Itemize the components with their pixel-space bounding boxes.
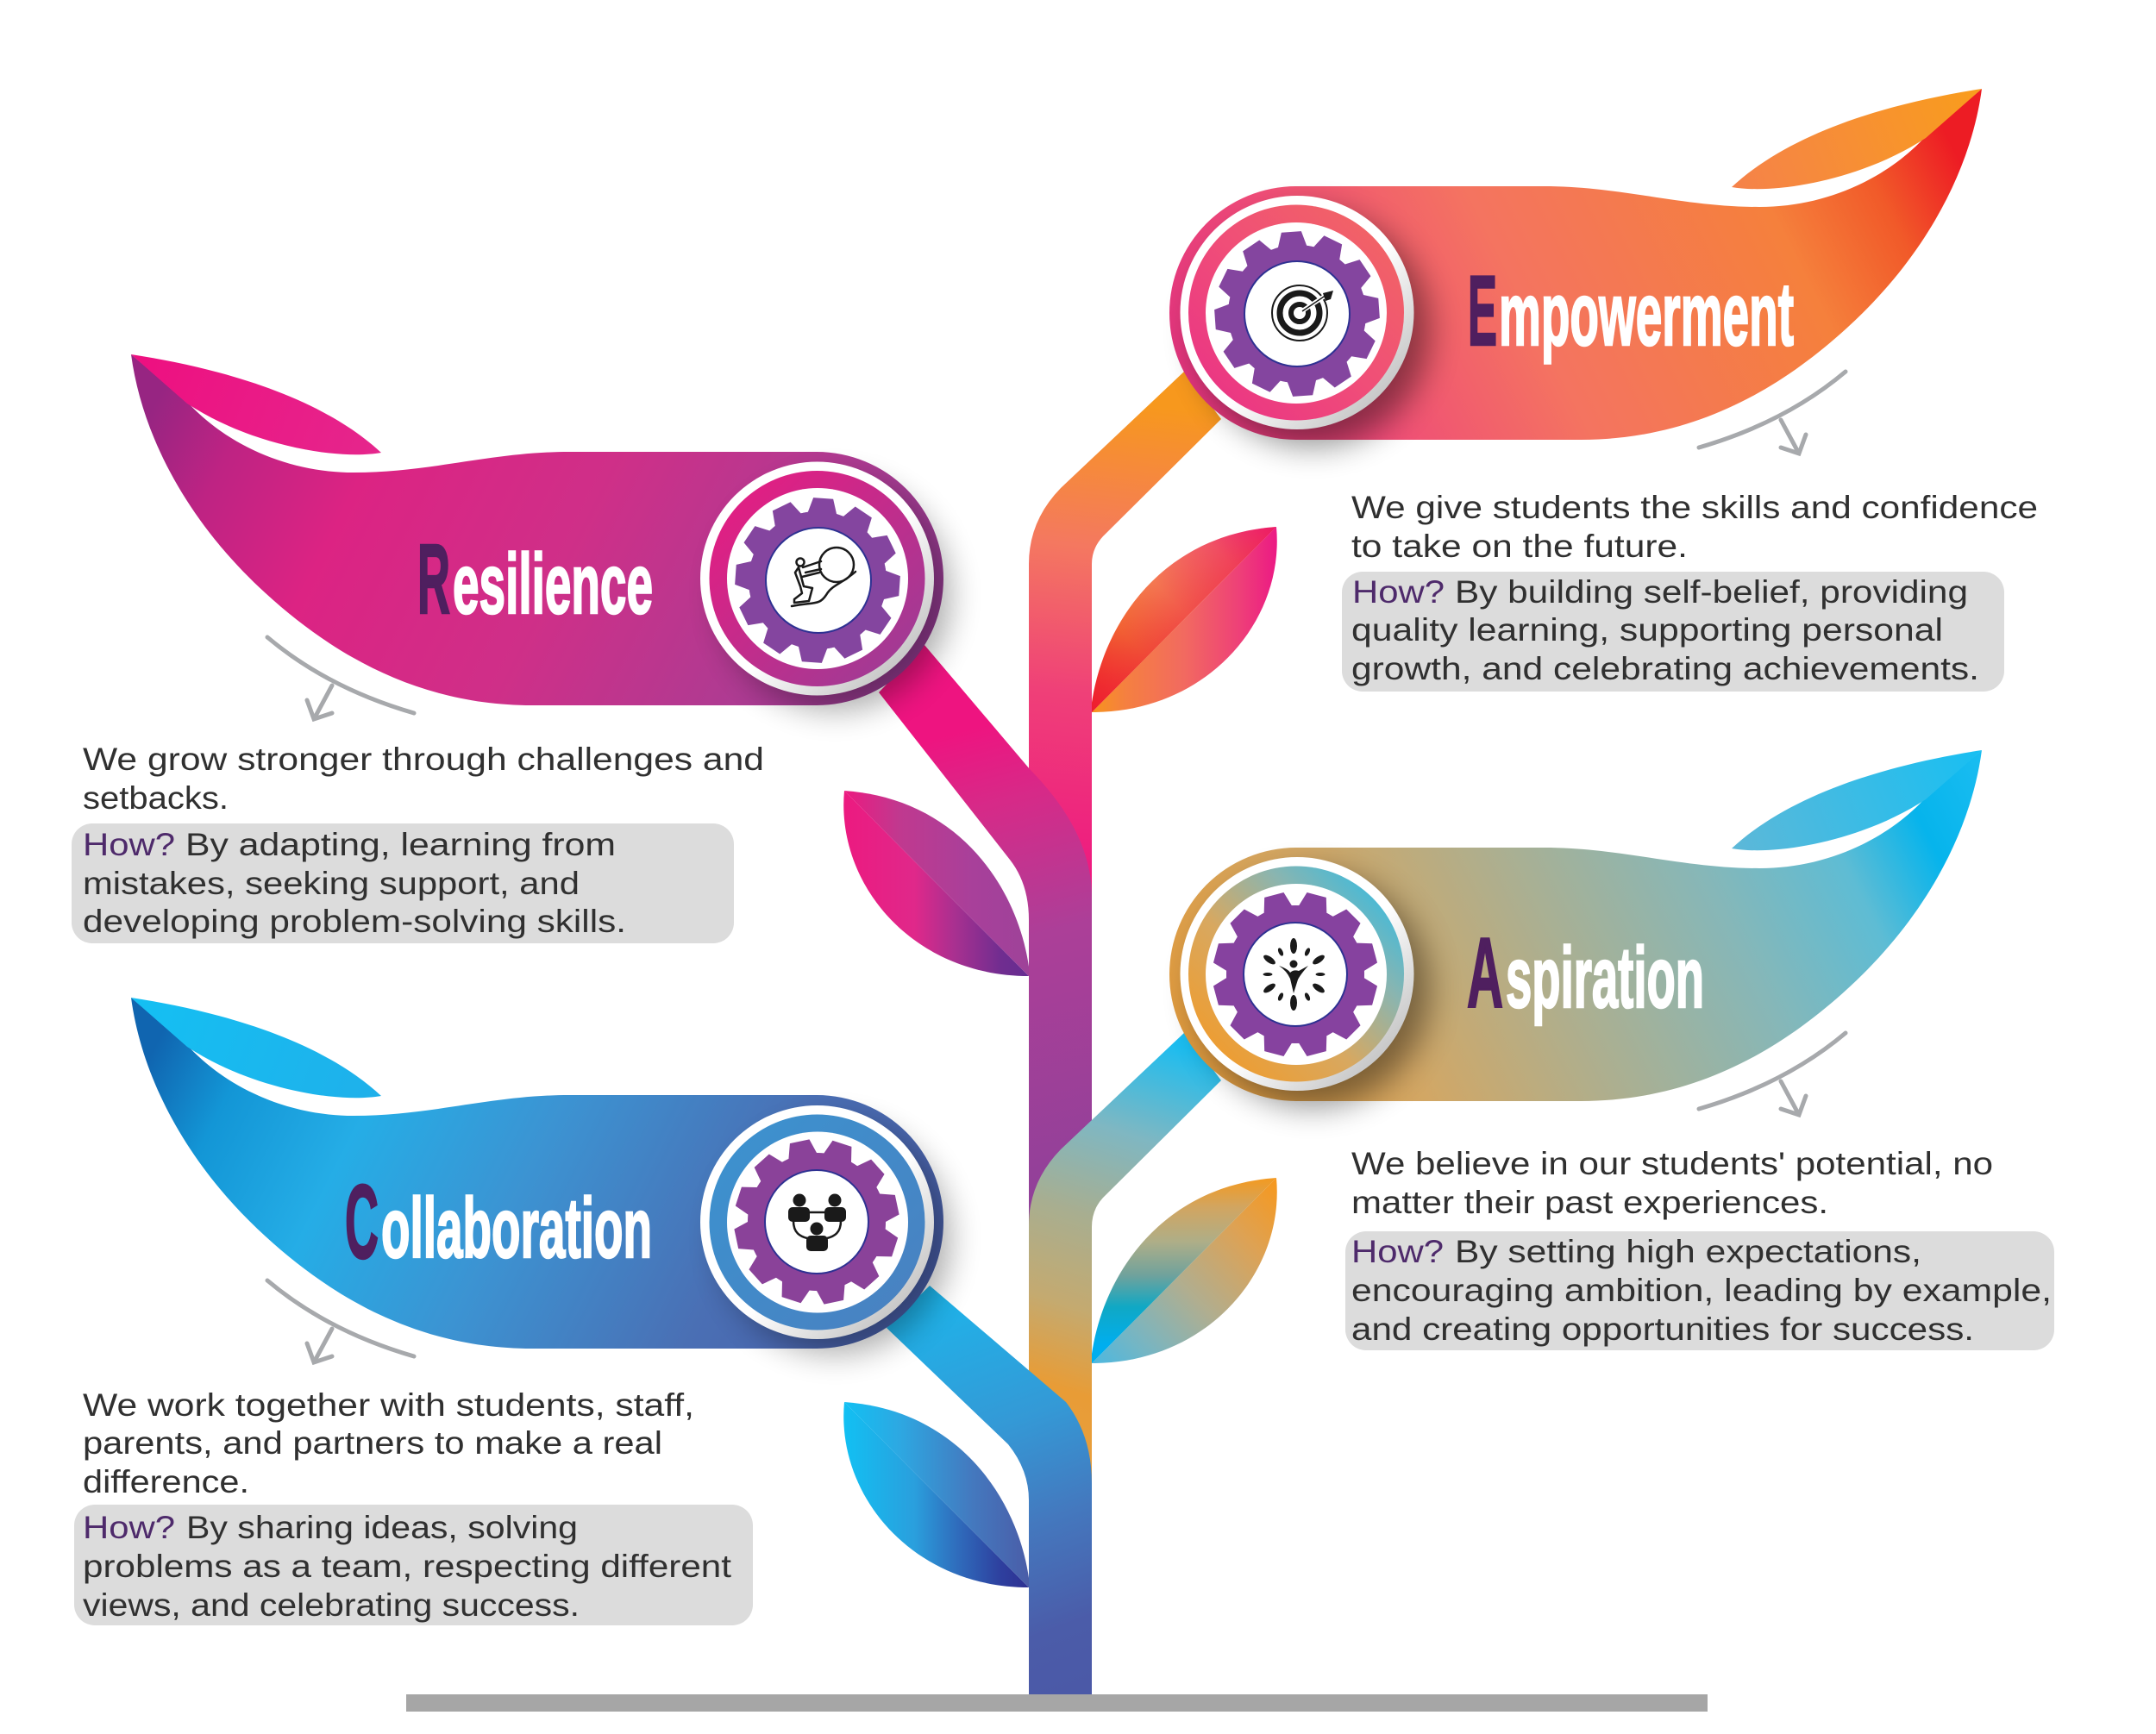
badge: empowerment gear: [1180, 196, 1414, 429]
heading: Resilience: esilience: [453, 536, 653, 631]
callout: empowerment how: [1342, 572, 2004, 692]
callout: resilience how: developing problem-solving skills.: [83, 904, 626, 939]
circle shadow: [719, 1123, 950, 1354]
callout: empowerment how: growth, and celebrating achievements.: [1351, 651, 1979, 686]
arrow: down from leaf: [1699, 1033, 1846, 1115]
heading: Empowerment: E: [1468, 256, 1497, 366]
icon: three people connected: [788, 1193, 846, 1251]
circle shadow: [1195, 212, 1430, 447]
badge: aspiration gear: [1180, 857, 1414, 1091]
panel: aspiration: [1169, 750, 2054, 1350]
text: collaboration description: difference.: [83, 1464, 249, 1499]
stem: resilience branch: [879, 645, 1092, 1233]
small leaf: aspiration: [1092, 1178, 1277, 1363]
callout: collaboration how: views, and celebrating success.: [83, 1587, 580, 1623]
panel: collaboration: [74, 998, 950, 1625]
callout: resilience how: mistakes, seeking support, and: [83, 866, 580, 901]
callout: resilience how: How?: [83, 827, 175, 862]
callout: aspiration how: [1345, 1231, 2054, 1350]
badge: collaboration gear: [700, 1105, 934, 1339]
callout: aspiration how: encouraging ambition, leading by example,: [1351, 1273, 2052, 1308]
heading: Aspiration: spiration: [1506, 930, 1704, 1026]
panel: empowerment: [1169, 89, 2038, 692]
badge: resilience gear: [700, 462, 934, 695]
callout: aspiration how: How?: [1351, 1234, 1444, 1269]
text: empowerment description: [1351, 490, 2038, 564]
arrow: down from leaf: [267, 637, 414, 719]
icon: person pushing boulder: [792, 548, 856, 606]
stem: collaboration branch: [887, 1286, 1092, 1694]
ground bar: [406, 1694, 1708, 1712]
text: collaboration description: We work together with students, staff,: [83, 1387, 694, 1423]
text: aspiration description: [1351, 1146, 1993, 1220]
text: resilience description: [83, 742, 764, 816]
icon: target with arrow: [1272, 285, 1333, 341]
small leaf: resilience: [843, 791, 1029, 976]
small leaf: empowerment: [1092, 527, 1277, 712]
heading: Collaboration: ollaboration: [381, 1180, 652, 1275]
callout: resilience how: By adapting, learning from: [185, 827, 616, 862]
heading: Empowerment: [1468, 256, 1794, 366]
text: empowerment description: to take on the future.: [1351, 529, 1688, 564]
callout: collaboration how: How?: [83, 1510, 175, 1545]
banner leaf: collaboration: [131, 998, 943, 1349]
heading: Aspiration: [1467, 918, 1704, 1029]
banner leaf: resilience: [131, 354, 943, 705]
arrow: down from leaf: [267, 1280, 414, 1362]
stem: aspiration branch: [1029, 1032, 1221, 1518]
circle shadow: [1195, 873, 1430, 1107]
text: aspiration description: matter their past experiences.: [1351, 1185, 1828, 1220]
panel: resilience: [72, 354, 950, 943]
heading: Resilience: [417, 524, 653, 635]
callout: aspiration how: By setting high expectations,: [1455, 1234, 1921, 1269]
heading: Collaboration: C: [345, 1163, 379, 1280]
circle shadow: [719, 479, 950, 711]
text: empowerment description: We give students the skills and confidence: [1351, 490, 2038, 525]
heading: Collaboration: [345, 1163, 652, 1280]
callout: empowerment how: quality learning, supporting personal: [1351, 612, 1943, 648]
heading: Resilience: R: [417, 524, 450, 635]
heading: Aspiration: A: [1467, 918, 1503, 1029]
callout: aspiration how: and creating opportunities for success.: [1351, 1311, 1974, 1347]
text: collaboration description: parents, and partners to make a real: [83, 1425, 662, 1461]
text: collaboration description: [83, 1387, 694, 1499]
callout: collaboration how: [74, 1505, 753, 1625]
banner leaf: aspiration: [1169, 750, 1982, 1101]
banner leaf: empowerment: [1169, 89, 1982, 440]
text: resilience description: setbacks.: [83, 780, 229, 816]
callout: collaboration how: problems as a team, respecting different: [83, 1549, 732, 1584]
heading: Empowerment: mpowerment: [1499, 265, 1794, 365]
callout: empowerment how: By building self-belief, providing: [1455, 574, 1968, 610]
small leaf: collaboration: [843, 1402, 1029, 1587]
callout: empowerment how: How?: [1352, 574, 1445, 610]
callout: collaboration how: By sharing ideas, solving: [186, 1510, 578, 1545]
stem: empowerment branch: [1029, 371, 1221, 1233]
callout: resilience how: [72, 823, 734, 943]
text: aspiration description: We believe in our students' potential, no: [1351, 1146, 1993, 1181]
text: resilience description: We grow stronger through challenges and: [83, 742, 764, 777]
plant stem: [879, 371, 1221, 1694]
arrow: down from leaf: [1699, 372, 1846, 454]
icon: person with leaves: [1262, 938, 1326, 1011]
